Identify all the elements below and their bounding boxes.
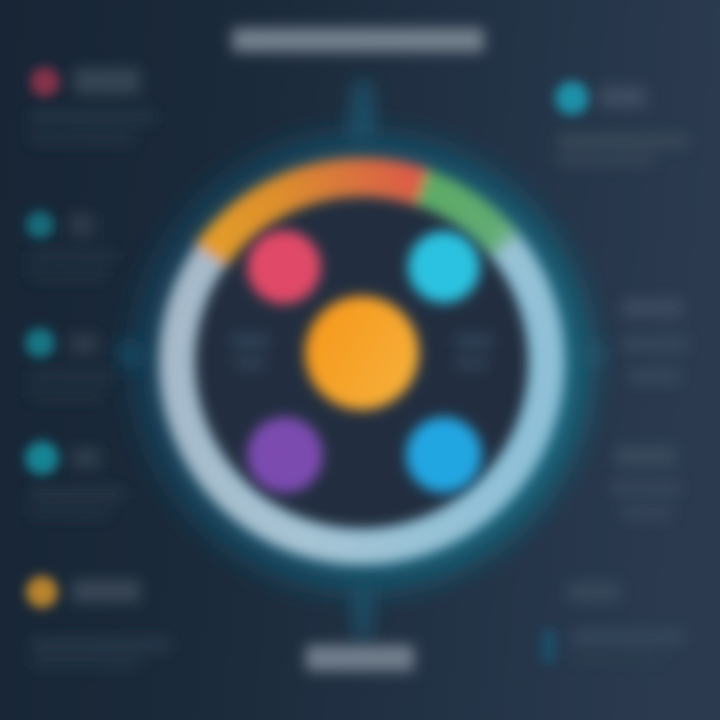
circle: purple <box>247 417 323 493</box>
right connector node <box>581 343 603 365</box>
icon: teal <box>26 211 54 239</box>
right item 2 <box>622 298 688 384</box>
ring base <box>177 246 547 547</box>
ring segment: orange to red <box>211 177 422 256</box>
icon: orange <box>26 576 58 608</box>
left item 3 <box>25 328 115 400</box>
icon: teal <box>555 81 589 115</box>
inner labels <box>232 335 492 368</box>
right item 1 <box>555 81 688 166</box>
icon: dark teal <box>541 628 557 664</box>
text block <box>30 214 115 280</box>
text block <box>32 580 170 668</box>
circle: orange centre <box>305 296 419 410</box>
top connector stem <box>348 82 376 140</box>
bottom label <box>306 645 414 671</box>
left item 2 <box>26 211 115 280</box>
circle: red <box>247 230 321 304</box>
ring segment: green <box>422 187 506 246</box>
text block <box>558 86 688 166</box>
icon: red <box>30 67 60 97</box>
left item 4 <box>25 441 125 518</box>
ring chart <box>177 177 547 547</box>
left connector node <box>117 341 143 367</box>
left item 1 <box>30 67 155 144</box>
text block <box>30 334 115 400</box>
inner disc <box>194 194 530 530</box>
icon: teal <box>25 328 55 358</box>
bottom connector stem <box>352 585 374 640</box>
left item 5 <box>26 576 170 668</box>
circle: blue <box>406 417 482 493</box>
text block <box>30 448 125 518</box>
title <box>232 28 484 52</box>
icon: teal <box>25 441 59 475</box>
teal glow around ring <box>162 162 562 562</box>
text block <box>568 582 684 662</box>
circle: cyan <box>408 231 480 303</box>
right item 3 <box>612 446 680 520</box>
circles <box>247 230 482 493</box>
text block <box>30 68 155 144</box>
right item 4 <box>541 582 684 664</box>
